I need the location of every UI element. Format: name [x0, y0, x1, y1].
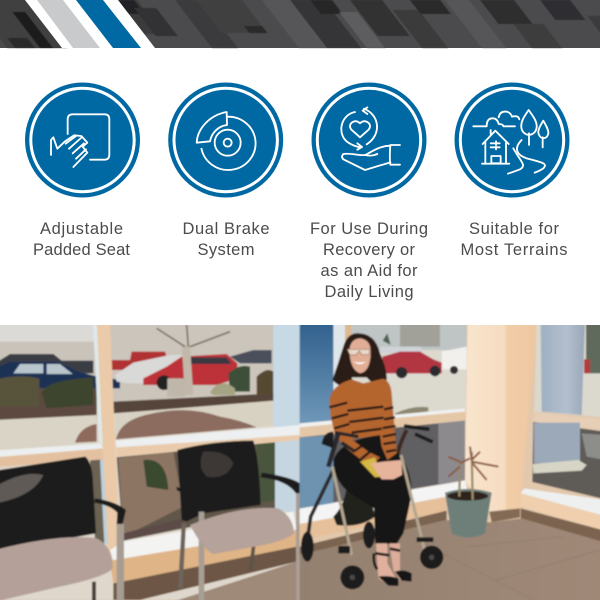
caption: adjustable padded seat: Adjustable: [40, 220, 123, 238]
blue column upper: [273, 320, 300, 427]
photo left half: windows and chairs: [0, 320, 300, 600]
glasses: [347, 349, 370, 355]
rollator front frame, handles and wheels: [322, 426, 443, 589]
icon: recovery and daily living: [312, 82, 426, 198]
window frames: [0, 443, 104, 457]
face: [349, 338, 371, 373]
parking lot window: [352, 320, 467, 422]
hedges and tree: [0, 325, 273, 408]
caption: dual brake system: [182, 220, 270, 259]
hands and book: [360, 457, 382, 477]
floor: [300, 518, 600, 600]
chair middle: [177, 441, 300, 600]
caption: adjustable padded seat: Padded Seat: [33, 241, 130, 259]
baseboard: [300, 511, 447, 555]
lower window: [117, 442, 275, 541]
caption: suitable for most terrains: Most Terrains: [460, 241, 568, 259]
caption: for use during recovery: Recovery or: [323, 241, 416, 259]
chair left: [0, 457, 126, 600]
header banner: [0, 0, 600, 48]
blue column segment: [300, 320, 334, 423]
caption: adjustable padded seat: [33, 220, 130, 259]
caption: for use during recovery: as an Aid for: [320, 262, 418, 280]
icon: suitable terrains: [454, 82, 570, 198]
sill band: [300, 408, 465, 427]
caption: dual brake system: Dual Brake: [182, 220, 270, 238]
icon: adjustable padded seat: [25, 82, 140, 198]
photo right half: woman, rollator, plant: [300, 320, 600, 600]
peach column: [465, 320, 537, 512]
caption: suitable for most terrains: [460, 220, 568, 259]
right window: [520, 320, 600, 531]
shoes and ankles: [375, 542, 396, 582]
caption: suitable for most terrains: Suitable for: [469, 220, 560, 238]
potted plant: [445, 447, 498, 537]
woman: [329, 333, 412, 586]
caption: for use during recovery: [310, 220, 428, 301]
caption: for use during recovery: For Use During: [310, 220, 428, 238]
caption: for use during recovery: Daily Living: [324, 283, 414, 301]
pants: [333, 435, 411, 544]
icon: dual brake system: [168, 82, 283, 198]
photo: woman seated with rollator in waiting room: [0, 320, 600, 600]
cars behind window: [0, 350, 272, 390]
rollator rear frame and wheels: [301, 430, 407, 562]
sweater: [329, 379, 397, 467]
caption: dual brake system: System: [198, 241, 254, 259]
hair back: [332, 333, 387, 389]
